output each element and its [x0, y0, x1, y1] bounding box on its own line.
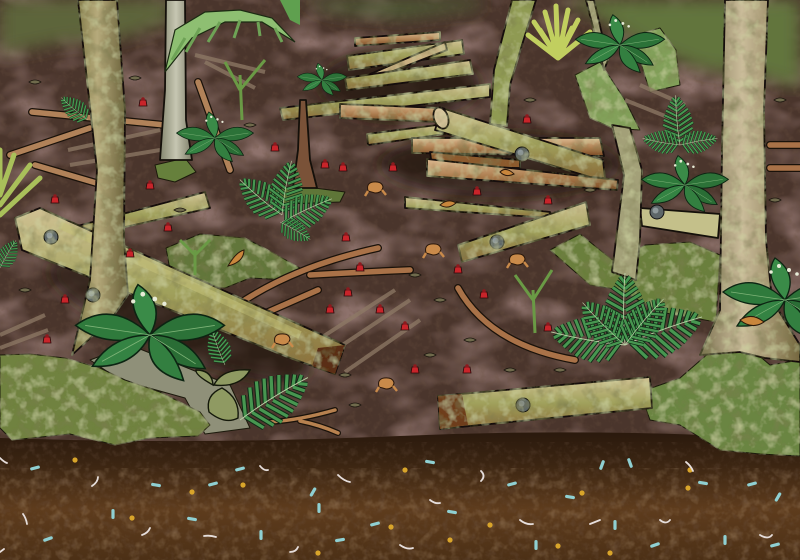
palm frond: [165, 0, 300, 72]
ferns: [0, 89, 719, 440]
fallen leaves: [19, 76, 786, 407]
three-leaf seedling: [196, 370, 250, 420]
soft shadows under log pile: [37, 50, 620, 405]
upper moss clump: [265, 186, 345, 204]
moss patch: centre left: [166, 234, 300, 288]
moss patch: bottom left: [0, 354, 210, 445]
moss patch: hanging right: [575, 28, 680, 130]
seedling stems: [180, 60, 552, 333]
thin vine trunk: [586, 0, 642, 280]
spiky yellow plant: [528, 6, 590, 58]
thin pale trunk: [160, 0, 192, 160]
bottom fallen log: [438, 377, 652, 429]
gray stone under moss: [90, 345, 250, 434]
log: right behind trunk: [640, 205, 720, 238]
soil organisms: [0, 457, 782, 556]
moss patch: bottom right: [640, 348, 800, 456]
spiky plant: left edge: [0, 150, 40, 215]
distant green undergrowth: [0, 0, 800, 88]
branches: left stems: [10, 82, 230, 190]
insects: [43, 97, 552, 373]
fallen fronds: [0, 55, 685, 372]
left trunk: [72, 0, 128, 355]
right trunk: [700, 0, 800, 362]
branches: centre: [245, 145, 800, 360]
soil layer: [0, 432, 800, 560]
broad-leaf plants: [76, 15, 800, 381]
log pile: upper centre: [280, 32, 618, 262]
small moss clump: [155, 158, 196, 182]
log: left small: [70, 192, 210, 238]
moss patch: centre right: [550, 234, 720, 322]
centre trunk: [490, 0, 536, 126]
palm stem: [293, 100, 317, 188]
large fallen log: [15, 208, 345, 374]
frogs: [272, 182, 528, 392]
